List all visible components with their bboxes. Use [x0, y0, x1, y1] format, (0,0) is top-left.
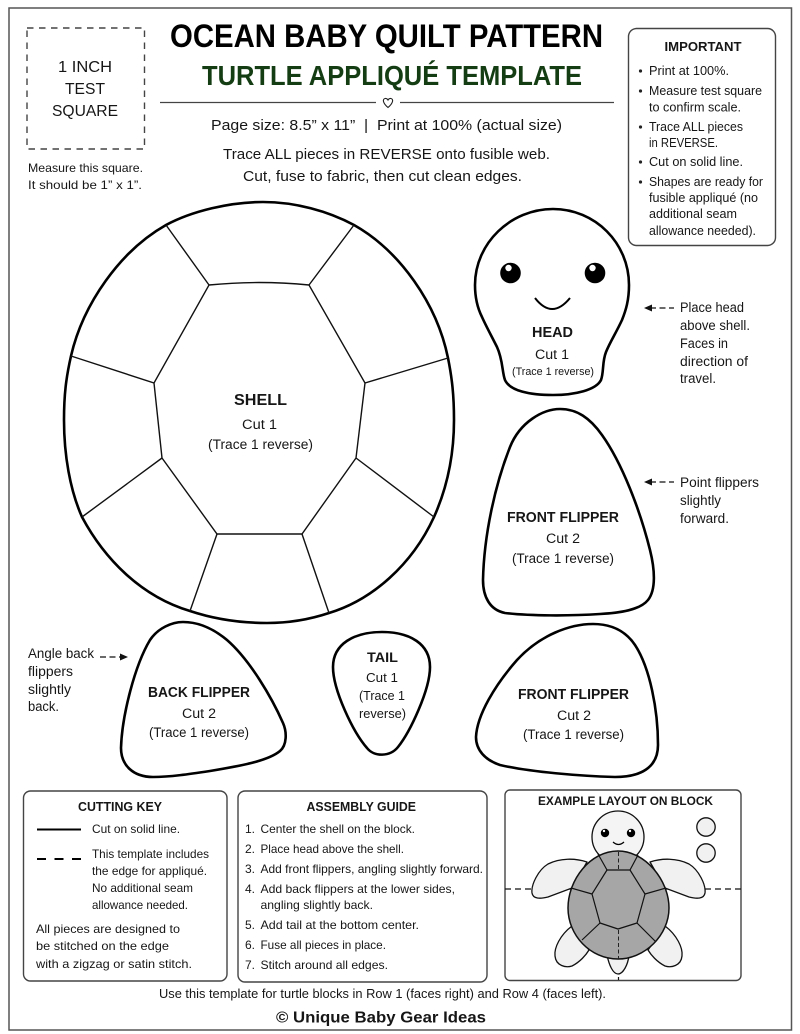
shell piece: SHELL	[234, 392, 287, 409]
panel: cutting key: No additional seam	[92, 881, 193, 895]
front flipper note: Point flippers	[680, 475, 759, 490]
page size line: Page size: 8.5” x 11” | Print at 100% (actual size)	[211, 117, 562, 134]
panel: important: Shapes are ready for	[649, 175, 763, 189]
panel: assembly guide: Fuse all pieces in place.	[260, 938, 386, 952]
subtitle: TURTLE APPLIQUÉ TEMPLATE	[202, 60, 582, 91]
back flipper note: Angle back	[28, 646, 94, 661]
tail piece	[333, 632, 430, 755]
panel: assembly guide: 7.	[245, 958, 255, 972]
panel: assembly guide: angling slightly back.	[260, 898, 373, 912]
panel: important	[628, 28, 776, 246]
head placement note: above shell.	[680, 318, 750, 333]
copyright: © Unique Baby Gear Ideas	[276, 1010, 486, 1026]
panel: cutting key: CUTTING KEY	[78, 800, 163, 814]
panel: assembly guide: 6.	[245, 938, 255, 952]
example: shell	[568, 851, 669, 959]
panel: important: to confirm scale.	[649, 100, 741, 114]
test square note: Measure this square.	[28, 161, 143, 175]
panel: important: Trace ALL pieces	[649, 120, 743, 134]
panel: assembly guide: Stitch around all edges.	[260, 958, 388, 972]
panel: assembly guide: 5.	[245, 918, 255, 932]
panel: cutting key: This template includes	[92, 847, 209, 861]
tail piece: TAIL	[367, 649, 398, 665]
title: OCEAN BABY QUILT PATTERN	[170, 18, 603, 54]
example: back flippers	[555, 926, 682, 967]
panel: important: fusible appliqué (no	[649, 191, 758, 205]
panel: assembly guide: Add front flippers, angling slightly forward.	[260, 862, 483, 876]
front flipper piece lower: Cut 2	[557, 708, 591, 723]
panel: important: Measure test square	[649, 84, 762, 98]
test square: TEST	[65, 81, 105, 98]
back flipper note: back.	[28, 699, 59, 714]
panel: important: IMPORTANT	[664, 39, 742, 54]
test square: 1 INCH	[58, 59, 112, 76]
head placement note: Faces in	[680, 336, 728, 351]
test square note	[28, 161, 143, 192]
arrow: head note	[644, 304, 674, 312]
head placement note: travel.	[680, 371, 716, 386]
arrow: front flipper note	[644, 478, 674, 486]
front flipper piece upper: (Trace 1 reverse)	[512, 551, 614, 566]
panel: example layout on block: EXAMPLE LAYOUT ON BLOCK	[538, 794, 713, 808]
front flipper piece upper	[483, 409, 654, 615]
front flipper piece upper: FRONT FLIPPER	[507, 510, 620, 526]
panel: cutting key	[24, 791, 227, 981]
panel: important: Cut on solid line.	[649, 155, 743, 169]
panel: assembly guide: 2.	[245, 842, 255, 856]
tail piece: reverse)	[359, 706, 406, 721]
icon: smile	[535, 298, 570, 309]
panel: assembly guide: Center the shell on the block.	[260, 822, 415, 836]
front flipper piece upper: Cut 2	[546, 531, 580, 546]
panel: cutting key: All pieces are designed to	[36, 922, 180, 936]
panel: cutting key: Cut on solid line.	[92, 822, 180, 836]
test square note: It should be 1” x 1”.	[28, 178, 142, 192]
panel: cutting key: be stitched on the edge	[36, 939, 169, 953]
example: button circles	[697, 818, 715, 862]
instructions: Cut, fuse to fabric, then cut clean edges.	[243, 168, 522, 185]
front flipper piece lower: FRONT FLIPPER	[518, 687, 629, 703]
panel: assembly guide: Add tail at the bottom center.	[260, 918, 419, 932]
head placement note	[680, 300, 750, 386]
back flipper piece	[121, 622, 286, 777]
panel: important: additional seam	[649, 207, 737, 221]
panel: important: in REVERSE.	[649, 136, 718, 150]
shell piece: Cut 1	[242, 417, 277, 432]
tail piece: Cut 1	[366, 670, 398, 685]
panel: important: Print at 100%.	[649, 64, 729, 78]
back flipper note: flippers	[28, 664, 73, 679]
shell piece: (Trace 1 reverse)	[208, 437, 313, 452]
back flipper note: slightly	[28, 682, 71, 697]
front flipper note: slightly	[680, 493, 721, 508]
tail piece: (Trace 1	[359, 688, 405, 703]
panel: cutting key: the edge for appliqué.	[92, 864, 207, 878]
head piece: HEAD	[532, 325, 573, 341]
arrow: back flipper note	[100, 654, 128, 660]
front flipper piece lower	[476, 624, 658, 777]
panel: assembly guide: 1.	[245, 822, 255, 836]
heart divider	[160, 98, 614, 108]
instructions	[223, 146, 550, 185]
head piece: (Trace 1 reverse)	[512, 366, 594, 378]
panel: example layout on block	[505, 790, 741, 980]
panel: cutting key: with a zigzag or satin stitch.	[35, 957, 192, 971]
head placement note: Place head	[680, 300, 744, 315]
usage note: Use this template for turtle blocks in Row 1 (faces right) and Row 4 (faces left).	[159, 987, 606, 1001]
front flipper piece lower: (Trace 1 reverse)	[523, 727, 624, 742]
panel: assembly guide: 3.	[245, 862, 255, 876]
panel: assembly guide: Add back flippers at the lower sides,	[260, 882, 455, 896]
back flipper note	[28, 646, 94, 714]
panel: assembly guide: Place head above the shell.	[260, 842, 404, 856]
test square: SQUARE	[52, 103, 118, 120]
back flipper piece: Cut 2	[182, 706, 216, 721]
instructions: Trace ALL pieces in REVERSE onto fusible web.	[223, 146, 550, 163]
example: front flippers	[532, 859, 705, 898]
example: head	[592, 811, 644, 863]
shell piece	[64, 202, 454, 623]
icon: right eye	[585, 263, 605, 283]
back flipper piece: BACK FLIPPER	[148, 685, 250, 701]
front flipper note	[680, 475, 759, 526]
head piece	[475, 209, 629, 395]
example: tail	[607, 955, 629, 974]
head piece: Cut 1	[535, 347, 569, 362]
panel: assembly guide	[238, 791, 487, 982]
front flipper note: forward.	[680, 511, 729, 526]
icon: left eye	[500, 263, 521, 283]
panel: important: allowance needed).	[649, 224, 756, 238]
panel: cutting key: allowance needed.	[92, 898, 188, 912]
head placement note: direction of	[680, 354, 748, 369]
test square	[27, 28, 144, 149]
back flipper piece: (Trace 1 reverse)	[149, 725, 249, 740]
panel: assembly guide: 4.	[245, 882, 255, 896]
panel: assembly guide: ASSEMBLY GUIDE	[306, 800, 416, 814]
